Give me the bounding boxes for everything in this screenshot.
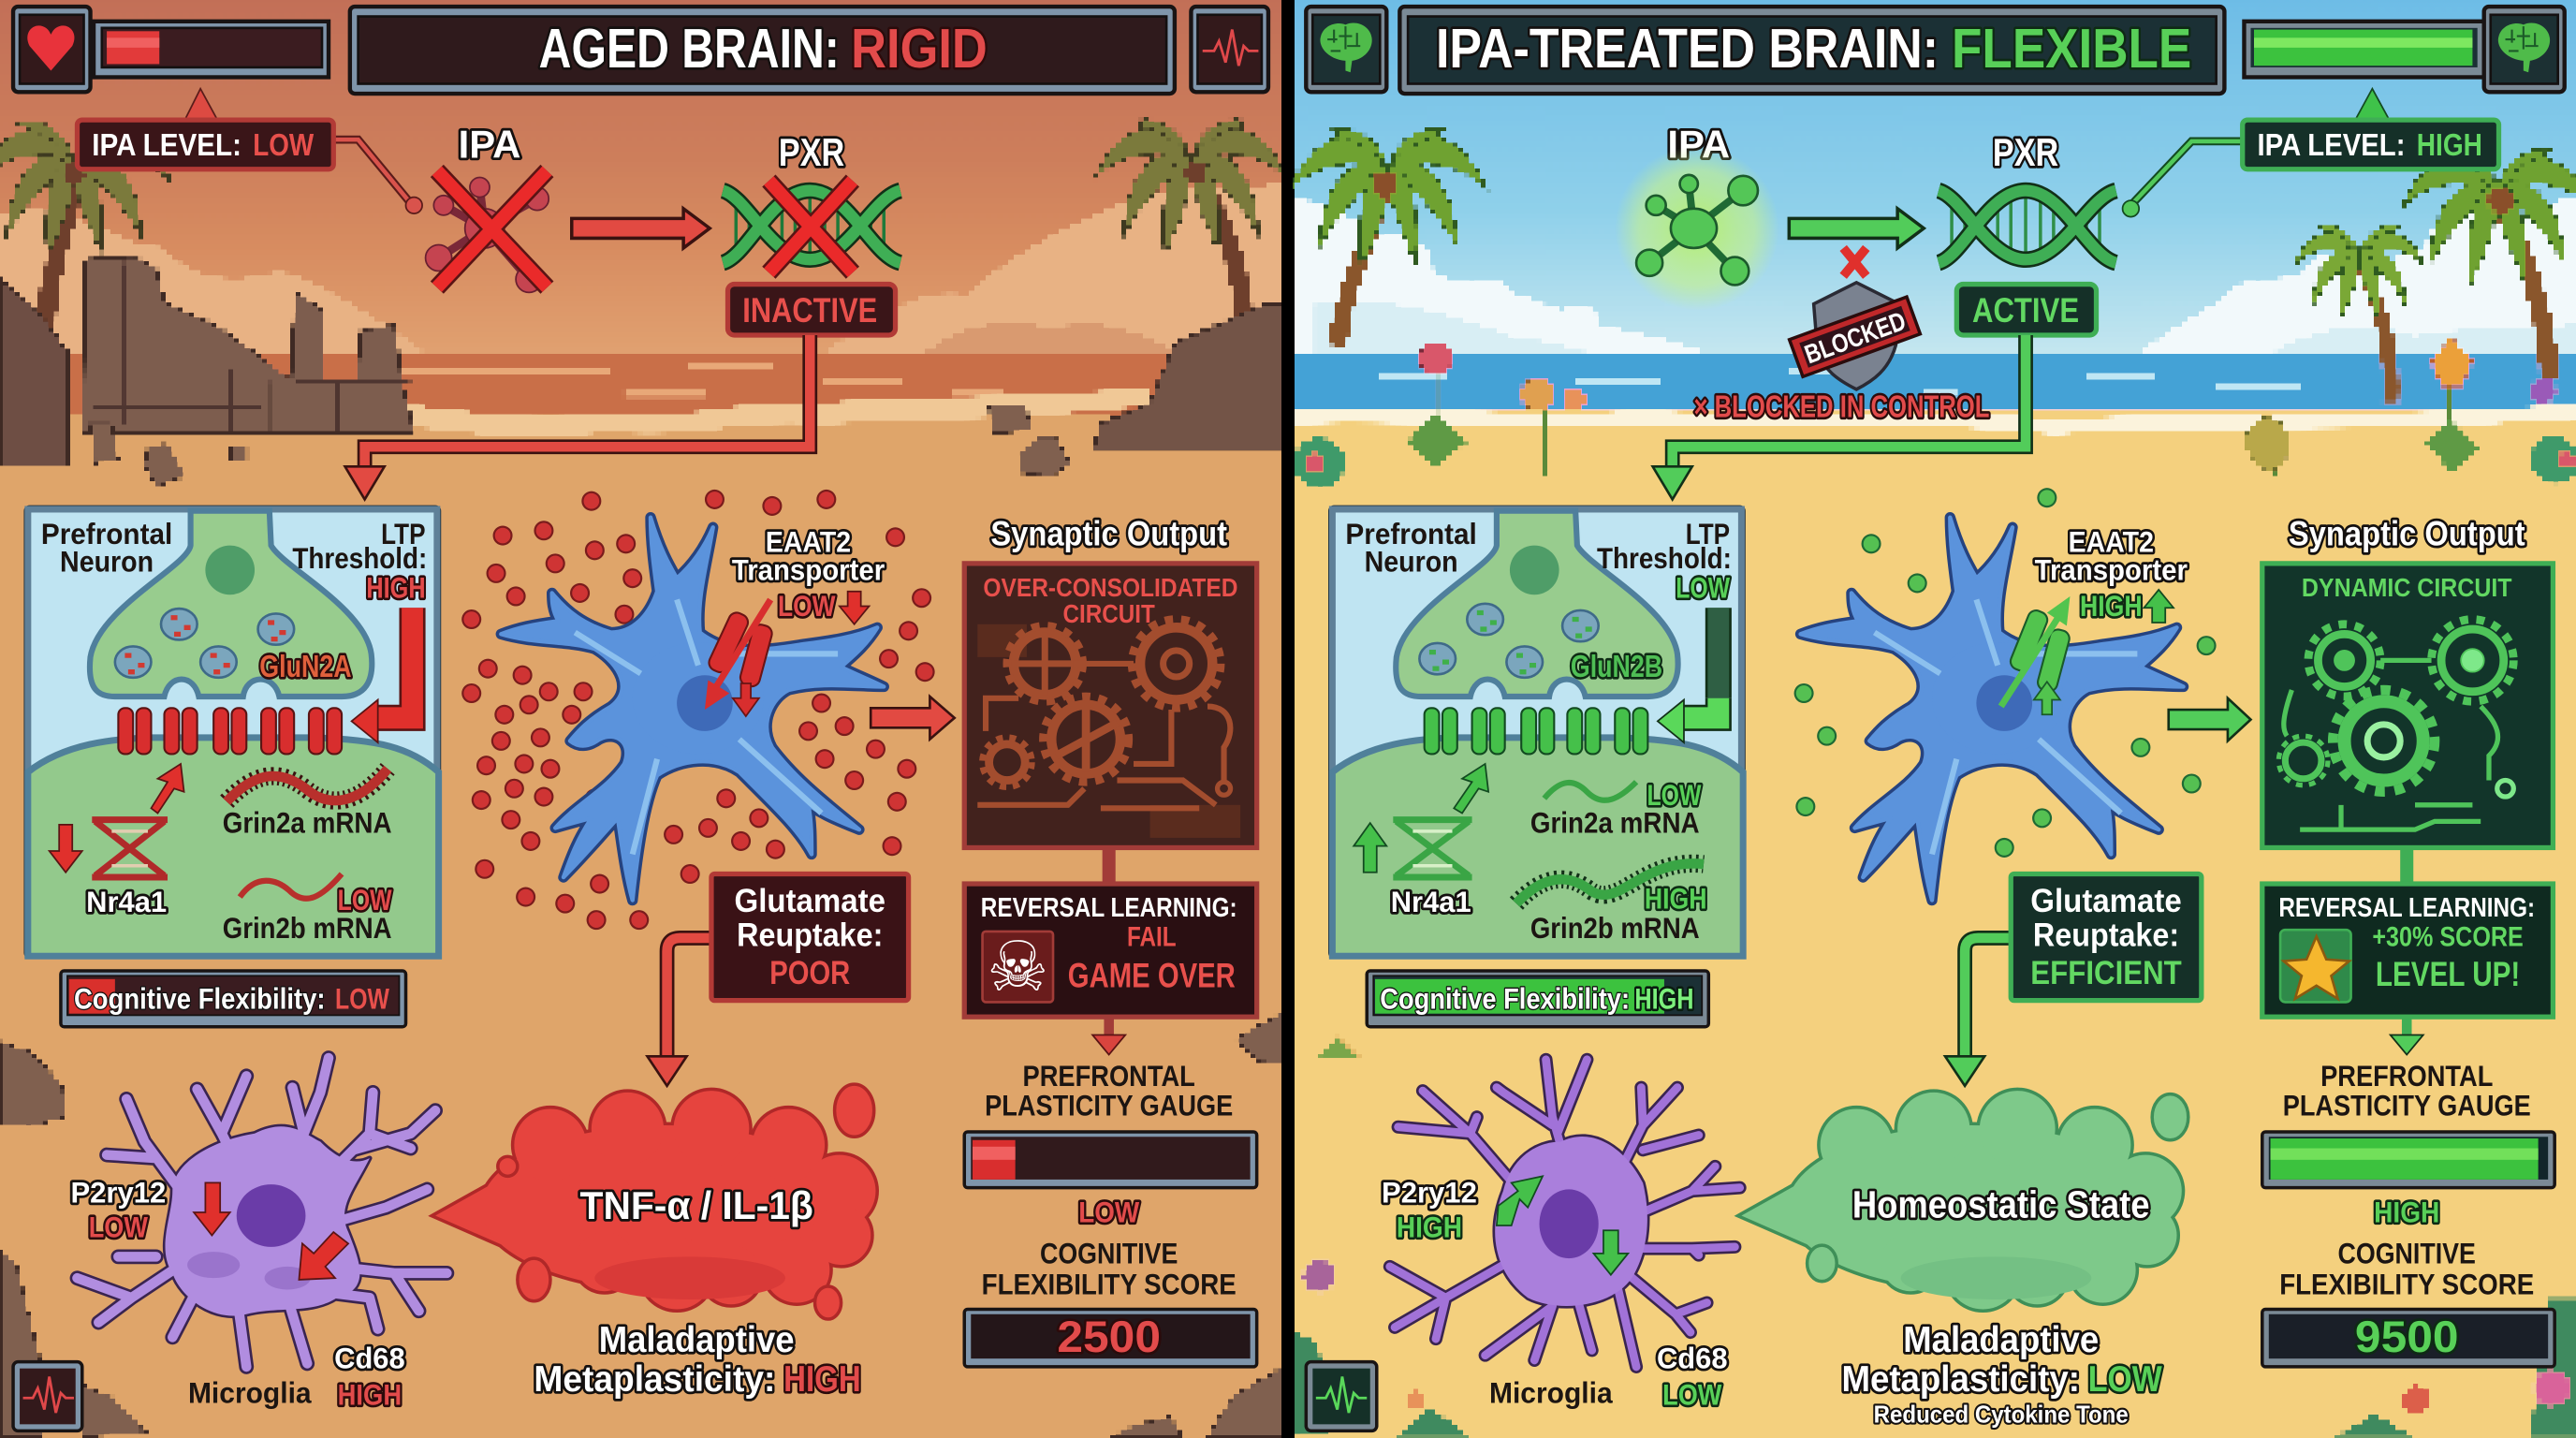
glutamate particles xyxy=(472,499,925,920)
label: EAAT2 Transporter low: LOW xyxy=(778,589,836,623)
LTP threshold bar arrow xyxy=(1658,608,1719,742)
label: Cd68 high xyxy=(334,1342,405,1411)
LTP threshold bar arrow xyxy=(352,608,413,742)
label: P2ry12 low xyxy=(70,1175,166,1243)
reversal learning box: LEVEL UP! xyxy=(2376,955,2520,993)
label: EAAT2 Transporter low: Transporter xyxy=(732,552,885,586)
arrow: P2ry12 up xyxy=(1497,1176,1543,1225)
panel: dynamic circuit: DYNAMIC CIRCUIT xyxy=(2302,573,2512,602)
glutamate reuptake box: Glutamate xyxy=(735,883,886,919)
IPA label: IPA xyxy=(459,122,520,166)
ruined walls xyxy=(0,257,1283,466)
label: blocked in control: × BLOCKED IN CONTROL xyxy=(1694,390,1989,425)
label: Prefrontal Neuron xyxy=(1345,517,1477,579)
arrow: PXR to neuron xyxy=(1653,335,2026,499)
maladaptive metaplasticity label xyxy=(534,1320,861,1400)
HUD: brain icon right xyxy=(2484,7,2565,92)
heading: synaptic output: Synaptic Output xyxy=(990,515,1227,553)
icon: crossed-out PXR DNA xyxy=(723,181,900,272)
reversal learning box xyxy=(964,884,1257,1017)
label: P2ry12 high: HIGH xyxy=(1397,1210,1462,1243)
label: EAAT2 Transporter high: Transporter xyxy=(2035,552,2188,586)
label: Prefrontal Neuron: Neuron xyxy=(60,545,154,579)
label: Grin2a mRNA: Grin2a mRNA xyxy=(1530,806,1700,840)
desert rocks xyxy=(0,404,1283,1437)
title bar xyxy=(350,7,1175,94)
astrocyte xyxy=(501,518,884,901)
maladaptive metaplasticity label: HIGH xyxy=(783,1359,861,1400)
Grin2b mRNA wave xyxy=(240,874,342,899)
panel: over-consolidated circuit xyxy=(964,564,1257,847)
cognitive flexibility score xyxy=(2262,1310,2554,1367)
plasticity gauge xyxy=(2262,1132,2554,1188)
label: LTP threshold low: LTP xyxy=(1686,517,1730,550)
icon: Nr4a1 DNA xyxy=(1393,820,1472,877)
arrowhead xyxy=(1092,1034,1125,1055)
label: Grin2a mRNA: Grin2a mRNA xyxy=(223,806,392,840)
label: EAAT2 Transporter high: HIGH xyxy=(2080,589,2143,623)
maladaptive metaplasticity label: Reduced Cytokine Tone xyxy=(1874,1402,2129,1429)
glutamate reuptake box: POOR xyxy=(769,955,850,991)
title bar: IPA-TREATED BRAIN: xyxy=(1436,17,1939,80)
vesicles xyxy=(115,609,294,678)
glutamate reuptake box xyxy=(1945,874,2202,1086)
score heading: COGNITIVE xyxy=(2338,1236,2476,1269)
maladaptive metaplasticity label: Maladaptive xyxy=(599,1320,795,1360)
plasticity gauge xyxy=(964,1132,1257,1188)
status: inactive xyxy=(728,285,896,335)
transporter xyxy=(707,610,774,688)
gauge heading: PREFRONTAL xyxy=(2320,1059,2493,1093)
palm tree left xyxy=(1288,128,1488,348)
label: EAAT2 Transporter low: EAAT2 xyxy=(766,525,851,559)
icon: active PXR DNA xyxy=(1939,191,2116,263)
maladaptive metaplasticity label: Maladaptive xyxy=(1903,1320,2099,1360)
icon: glowing IPA molecule xyxy=(1615,146,1779,311)
maladaptive metaplasticity label xyxy=(1841,1320,2162,1429)
gauge value: LOW xyxy=(1078,1196,1139,1229)
score heading: FLEXIBILITY SCORE xyxy=(982,1268,1237,1301)
label: Nr4a1: Nr4a1 xyxy=(86,885,167,918)
IPA level tag: LOW xyxy=(253,128,315,163)
transporter xyxy=(2008,608,2071,693)
arrow: IPA to PXR xyxy=(1789,209,1924,248)
glutamate reuptake box xyxy=(648,874,909,1086)
beach flowers and bushes xyxy=(1293,337,2576,1437)
heading: synaptic output: Synaptic Output xyxy=(2289,515,2525,553)
HUD: bottom pulse icon xyxy=(13,1362,82,1431)
panel: dynamic circuit xyxy=(2262,564,2553,847)
title bar: AGED BRAIN: xyxy=(539,17,840,80)
label: Microglia: Microglia xyxy=(188,1376,312,1410)
reversal learning box: REVERSAL LEARNING: xyxy=(2278,893,2535,923)
score heading xyxy=(982,1236,1237,1301)
homeostatic cloud: Homeostatic State xyxy=(1852,1182,2150,1225)
icon: blocked shield xyxy=(1790,283,1920,389)
Grin2a mRNA wave xyxy=(227,769,388,801)
label: Microglia: Microglia xyxy=(1489,1376,1613,1410)
IPA label: IPA xyxy=(1667,122,1730,166)
Grin2b mRNA wave xyxy=(1516,863,1704,903)
Grin2a mRNA wave xyxy=(1544,782,1636,800)
label: EAAT2 Transporter high xyxy=(2035,525,2188,623)
label: Prefrontal Neuron: Neuron xyxy=(1365,545,1458,579)
connector xyxy=(1105,849,1113,882)
label: Cd68 low: LOW xyxy=(1662,1377,1722,1411)
glowing gears xyxy=(2278,620,2513,829)
IPA level tag: HIGH xyxy=(2417,128,2482,163)
glutamate reuptake box: Reuptake: xyxy=(2033,917,2179,954)
reversal learning box: +30% SCORE xyxy=(2372,922,2524,953)
gauge value: HIGH xyxy=(2374,1196,2439,1229)
label: LTP threshold low xyxy=(1597,517,1732,605)
reversal learning box: GAME OVER xyxy=(1068,957,1236,995)
PXR label: PXR xyxy=(779,130,844,174)
palm tree right xyxy=(1093,120,1289,337)
title bar xyxy=(1399,7,2224,94)
reversal learning box xyxy=(2262,884,2553,1017)
label: Cd68 low: Cd68 xyxy=(1657,1342,1727,1375)
label: LTP threshold high xyxy=(292,517,427,605)
HUD: brain icon left xyxy=(1306,7,1386,92)
reversal learning box: FAIL xyxy=(1127,922,1177,953)
cognitive flexibility bar: Cognitive Flexibility: xyxy=(1380,981,1630,1015)
astrocyte xyxy=(1801,518,2184,901)
small palm tree xyxy=(2292,226,2426,403)
label: Grin2b high: HIGH xyxy=(1645,881,1707,915)
icon: star xyxy=(2280,930,2351,1002)
panel: IPA-treated brain xyxy=(1306,7,2565,1431)
IPA level tag xyxy=(2123,89,2499,217)
cytokine cloud xyxy=(435,1084,875,1319)
cytokine cloud: TNF-α / IL-1β xyxy=(580,1183,813,1227)
icon: Nr4a1 DNA xyxy=(92,820,168,877)
glutamate reuptake box: Glutamate xyxy=(2030,883,2182,919)
background: tropical beach xyxy=(1288,0,2576,1438)
label: Cd68 high: HIGH xyxy=(338,1377,402,1411)
gauge heading: PLASTICITY GAUGE xyxy=(2283,1088,2531,1122)
microglia xyxy=(77,1058,446,1367)
label: Grin2b mRNA: Grin2b mRNA xyxy=(223,911,392,945)
cognitive flexibility score: 2500 xyxy=(1057,1313,1161,1362)
arrow: PXR to neuron xyxy=(345,335,810,499)
icon: inactive IPA molecule xyxy=(426,170,549,292)
HUD: bottom pulse icon xyxy=(1306,1362,1377,1431)
gauge heading xyxy=(2283,1059,2531,1122)
label: Prefrontal Neuron: Prefrontal xyxy=(41,517,172,550)
arrow: astrocyte to synaptic output xyxy=(2169,698,2250,741)
maladaptive metaplasticity label: LOW xyxy=(2088,1359,2162,1400)
arrow: to gauge xyxy=(1106,1019,1112,1034)
label: P2ry12 high: P2ry12 xyxy=(1382,1175,1477,1209)
HUD: full energy bar xyxy=(2244,22,2484,77)
cognitive flexibility bar: HIGH xyxy=(1634,981,1694,1015)
arrow: Nr4a1 up xyxy=(1354,823,1386,873)
maladaptive metaplasticity label: Metaplasticity: xyxy=(1841,1359,2080,1400)
label: LTP threshold low: LOW xyxy=(1676,571,1730,605)
icon: small red X xyxy=(1843,248,1866,276)
label: Prefrontal Neuron xyxy=(41,517,172,579)
label: GluN2B: GluN2B xyxy=(1571,650,1662,684)
connector xyxy=(2403,849,2410,882)
score heading: FLEXIBILITY SCORE xyxy=(2279,1268,2534,1301)
palm tree right xyxy=(2400,149,2576,378)
label: Cd68 high: Cd68 xyxy=(334,1342,405,1375)
label: LTP threshold high: Threshold: xyxy=(292,541,427,575)
gauge heading: PLASTICITY GAUGE xyxy=(985,1088,1233,1122)
cognitive flexibility score xyxy=(964,1310,1257,1367)
label: LTP threshold high: LTP xyxy=(381,517,426,550)
arrow: up to receptors xyxy=(151,764,184,814)
reversal learning box: REVERSAL LEARNING: xyxy=(981,893,1237,923)
status: inactive: INACTIVE xyxy=(742,291,877,330)
label: Nr4a1: Nr4a1 xyxy=(1391,885,1471,918)
label: EAAT2 Transporter low xyxy=(732,525,885,624)
label: GluN2A: GluN2A xyxy=(259,650,352,684)
label: P2ry12 low: P2ry12 xyxy=(70,1175,166,1209)
label: Grin2b mRNA: Grin2b mRNA xyxy=(1530,911,1700,945)
label: Grin2a low: LOW xyxy=(1647,778,1702,812)
label: Cd68 low xyxy=(1657,1342,1727,1411)
panel: over-consolidated circuit: CIRCUIT xyxy=(1063,599,1155,628)
icon: blocked shield: BLOCKED xyxy=(1801,306,1910,369)
status: active: ACTIVE xyxy=(1972,291,2079,330)
glutamate particles xyxy=(1804,498,2206,847)
arrow: up to receptors xyxy=(1454,764,1488,814)
glutamate reuptake box: EFFICIENT xyxy=(2030,955,2182,991)
vesicles xyxy=(1419,604,1599,678)
HUD: health bar xyxy=(94,22,329,77)
HUD: heart icon xyxy=(13,7,91,92)
label: LTP threshold low: Threshold: xyxy=(1597,541,1732,575)
arrow: P2ry12 down xyxy=(194,1182,230,1236)
arrow: IPA to PXR xyxy=(572,209,710,248)
label: Prefrontal Neuron: Prefrontal xyxy=(1345,517,1477,550)
status: active xyxy=(1956,285,2097,335)
panel: over-consolidated circuit: OVER-CONSOLIDATED xyxy=(983,573,1237,602)
panel: prefrontal neuron synapse xyxy=(1329,506,1745,958)
receptors xyxy=(118,708,342,754)
gauge heading: PREFRONTAL xyxy=(1023,1059,1195,1093)
gauge heading xyxy=(985,1059,1233,1122)
maladaptive metaplasticity label: Metaplasticity: xyxy=(534,1359,775,1400)
background: aged desert beach xyxy=(0,0,1289,1438)
title bar: FLEXIBLE xyxy=(1952,17,2191,80)
arrow: to gauge xyxy=(2404,1019,2409,1034)
label: EAAT2 Transporter high: EAAT2 xyxy=(2069,525,2154,559)
PXR label: PXR xyxy=(1993,130,2058,174)
icon: skull: ☠ xyxy=(987,928,1048,1007)
cognitive flexibility bar: LOW xyxy=(335,981,389,1015)
receptors xyxy=(1425,708,1647,754)
IPA level tag xyxy=(77,89,422,213)
panel: aged brain xyxy=(13,7,1268,1431)
glutamate reuptake box: Reuptake: xyxy=(737,917,883,954)
cognitive flexibility score: 9500 xyxy=(2355,1313,2459,1362)
homeostatic cloud xyxy=(1741,1091,2188,1310)
cognitive flexibility bar: Cognitive Flexibility: xyxy=(74,981,326,1015)
panel: prefrontal neuron synapse xyxy=(24,506,440,958)
arrow: low uptake xyxy=(716,599,770,686)
IPA level tag: IPA LEVEL: xyxy=(2258,128,2405,163)
label: P2ry12 high xyxy=(1382,1175,1477,1243)
arrow: Cd68 down xyxy=(1593,1230,1628,1275)
arrow: astrocyte to synaptic output xyxy=(871,697,955,740)
palm tree left xyxy=(0,121,171,337)
score heading: COGNITIVE xyxy=(1040,1236,1178,1269)
label: Grin2b low: LOW xyxy=(338,883,392,917)
cognitive flexibility bar xyxy=(1367,971,1708,1027)
score heading xyxy=(2279,1236,2534,1301)
arrow: Nr4a1 down xyxy=(50,825,82,873)
arrowhead xyxy=(2391,1034,2423,1055)
rusted gears xyxy=(977,620,1240,838)
label: P2ry12 low: LOW xyxy=(89,1210,148,1243)
title bar: RIGID xyxy=(851,17,988,80)
center divider xyxy=(1281,0,1293,1438)
IPA level tag: IPA LEVEL: xyxy=(92,128,242,163)
arrow: high uptake xyxy=(2001,614,2060,707)
label: LTP threshold high: HIGH xyxy=(366,571,426,605)
HUD: pulse icon xyxy=(1191,7,1268,92)
cognitive flexibility bar xyxy=(61,971,406,1027)
microglia xyxy=(1390,1060,1740,1367)
arrow: Cd68 xyxy=(299,1232,348,1280)
